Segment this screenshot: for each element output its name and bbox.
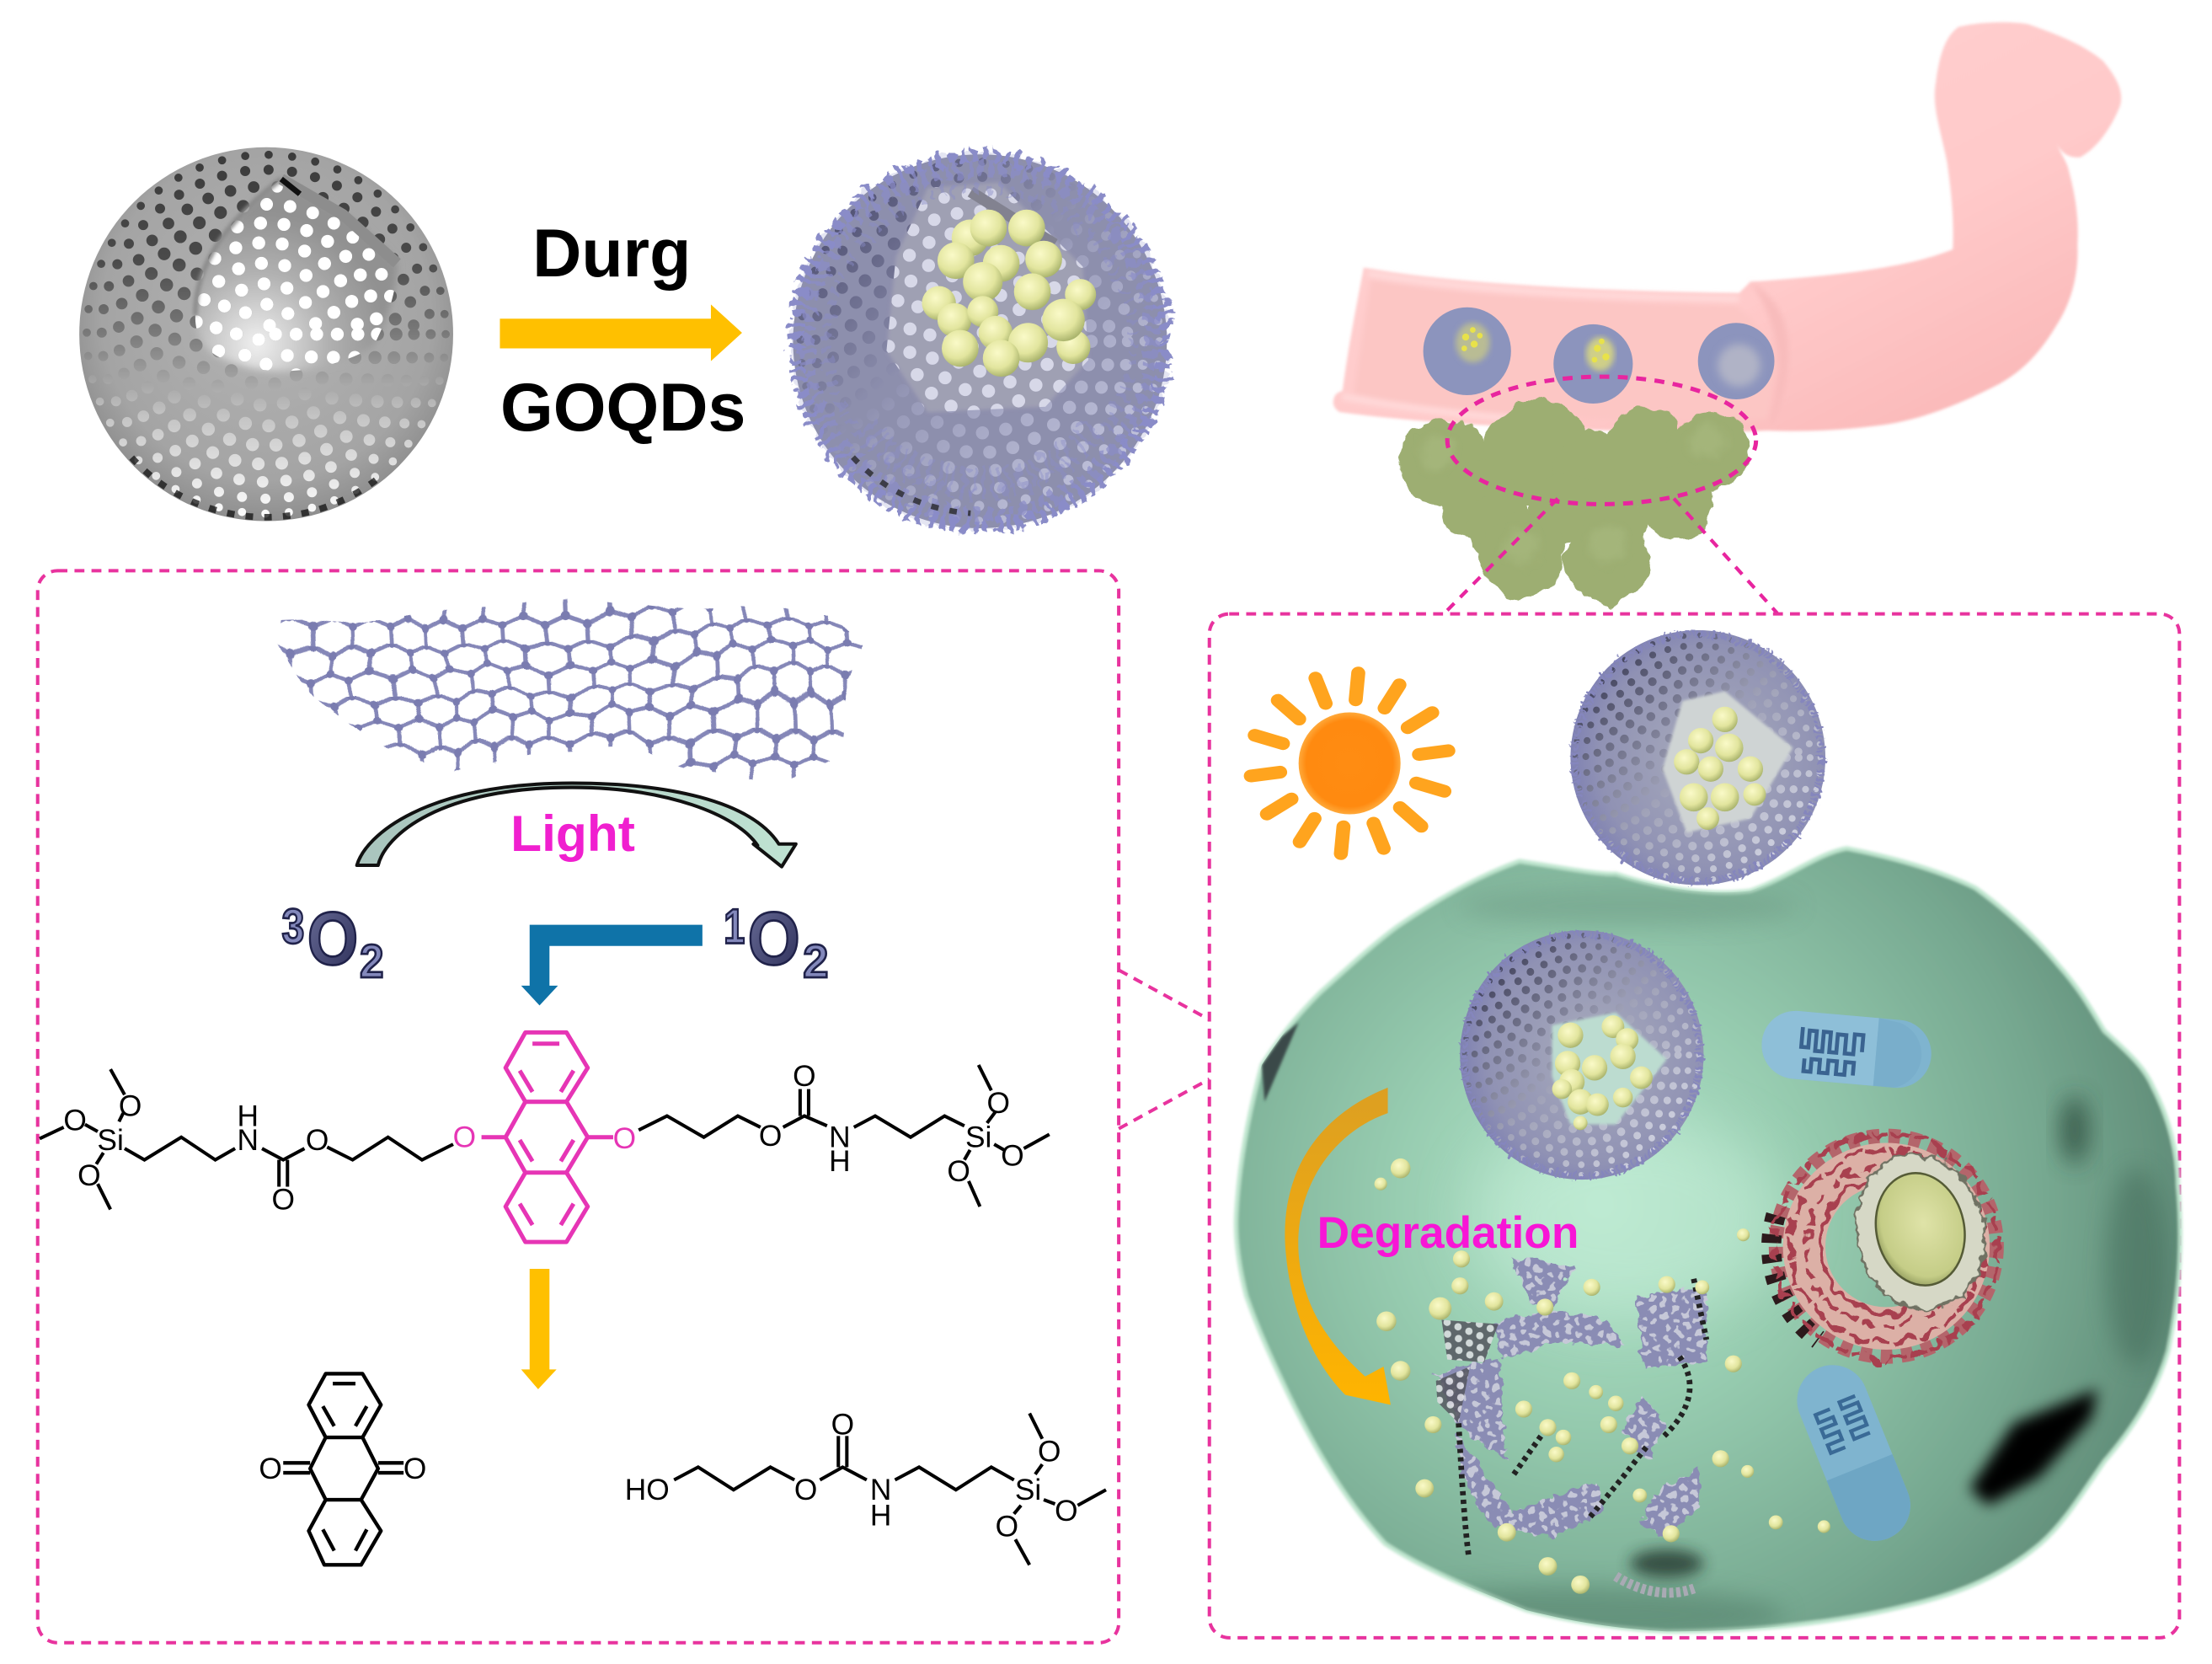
icon: blood vessel	[1333, 22, 2121, 432]
atom labels: H	[829, 1145, 851, 1178]
chemical structure: anthracene linker	[40, 1032, 1050, 1242]
label: triplet oxygen: 3	[282, 899, 304, 954]
right chain	[638, 1065, 1050, 1207]
icon: tumour cell body	[1236, 848, 2180, 1643]
chemical structure: silane alcohol fragment: H	[870, 1499, 891, 1532]
drug beads	[1552, 1015, 1653, 1130]
atom labels: N	[829, 1121, 851, 1153]
icon: mitochondrion upper	[1759, 1009, 1934, 1090]
nucleus	[1841, 1142, 1999, 1321]
atom labels: O	[119, 1090, 142, 1123]
chemical structure: silane alcohol fragment: O	[831, 1409, 854, 1442]
callout: lines linking chemistry panel to cell panel	[1119, 970, 1210, 1129]
atom labels: O	[1001, 1139, 1024, 1172]
heading: Durg label: Durg	[532, 216, 691, 292]
atom labels	[63, 1060, 1024, 1216]
small fragment at base	[1616, 1576, 1696, 1592]
cell shading	[1262, 886, 2168, 1643]
drug beads	[1674, 707, 1766, 830]
atom labels: N	[237, 1124, 259, 1157]
atom labels: O	[453, 1121, 476, 1153]
atom labels: O	[793, 1060, 816, 1093]
chemical structure: silane alcohol fragment: O	[996, 1511, 1018, 1544]
atom labels: O	[77, 1159, 101, 1192]
label: triplet oxygen	[282, 896, 384, 987]
chemical structure: silane alcohol fragment: O	[794, 1474, 817, 1506]
label: singlet oxygen: 2	[803, 935, 828, 987]
chemical structure: silane alcohol fragment: Si	[1015, 1474, 1041, 1506]
icon: endoplasmic reticulum and nucleus	[1771, 1134, 1999, 1358]
atom labels: O	[759, 1120, 782, 1153]
icon: particle inside cell	[1460, 930, 1703, 1180]
chemical structure: silane alcohol fragment: HO	[625, 1474, 670, 1506]
icon: graphene oxide quantum dot sheet	[279, 595, 863, 778]
arrow: light-driven curved arrow	[357, 784, 796, 867]
label: singlet oxygen: O	[748, 896, 800, 981]
chemical structure: anthraquinone: O	[259, 1453, 282, 1485]
drug beads in sphere	[922, 210, 1096, 377]
label: singlet oxygen	[724, 896, 828, 987]
icon: tumour tissue clump	[1399, 399, 1750, 607]
label: singlet oxygen: 1	[724, 899, 745, 954]
callout: zoom lines to cell panel	[1445, 499, 1777, 613]
icon: particle entering cell	[1570, 630, 1825, 886]
arrow: loading arrow	[500, 304, 742, 361]
atom labels: O	[271, 1183, 295, 1216]
atom labels: Si	[97, 1124, 124, 1157]
chemical structure: silane alcohol fragment: O	[1038, 1436, 1061, 1469]
chemical structure: silane alcohol fragment: N	[870, 1474, 891, 1506]
icon: mitochondrion lower	[1787, 1355, 1921, 1552]
chemical structure: anthraquinone: O	[403, 1453, 426, 1485]
callout: zoom ellipse on tumour	[1447, 377, 1756, 504]
panel: cell uptake	[1210, 614, 2179, 1638]
arrow: blue elbow arrow	[521, 925, 703, 1005]
atom labels: O	[63, 1104, 87, 1137]
arrow: degradation arrow	[1285, 1088, 1391, 1405]
chemical structure: silane alcohol fragment: O	[1055, 1495, 1078, 1528]
label: triplet oxygen: O	[307, 896, 358, 981]
left chain	[40, 1069, 453, 1209]
atom labels: O	[613, 1122, 636, 1155]
released drug beads	[1375, 1158, 1830, 1594]
anthracene core	[482, 1032, 613, 1242]
heading: GOQDs label: GOQDs	[500, 370, 745, 446]
icon: sun	[1251, 673, 1448, 853]
panel: photosensitive linker chemistry	[38, 570, 1119, 1643]
chemical structure: silane alcohol fragment	[625, 1409, 1106, 1565]
vessel lumen	[1354, 279, 1776, 420]
nanoparticles in vessel	[1424, 308, 1775, 404]
icon: degraded shell fragments	[1436, 1258, 1707, 1592]
icon: bare porous silica sphere	[79, 147, 453, 522]
arrow: yellow reaction arrow	[521, 1269, 557, 1389]
atom labels: Si	[965, 1121, 991, 1153]
icon: drug-loaded GOQD-coated sphere	[791, 152, 1169, 530]
fuzzy graphene layer	[791, 152, 1169, 530]
atom labels: O	[986, 1087, 1010, 1120]
atom labels: H	[237, 1100, 259, 1132]
atom labels: O	[306, 1124, 329, 1157]
label: Degradation: Degradation	[1317, 1208, 1579, 1258]
atom labels: O	[947, 1155, 970, 1188]
label: Light: Light	[510, 805, 635, 862]
label: triplet oxygen: 2	[360, 935, 384, 987]
chemical structure: anthraquinone	[259, 1373, 426, 1565]
